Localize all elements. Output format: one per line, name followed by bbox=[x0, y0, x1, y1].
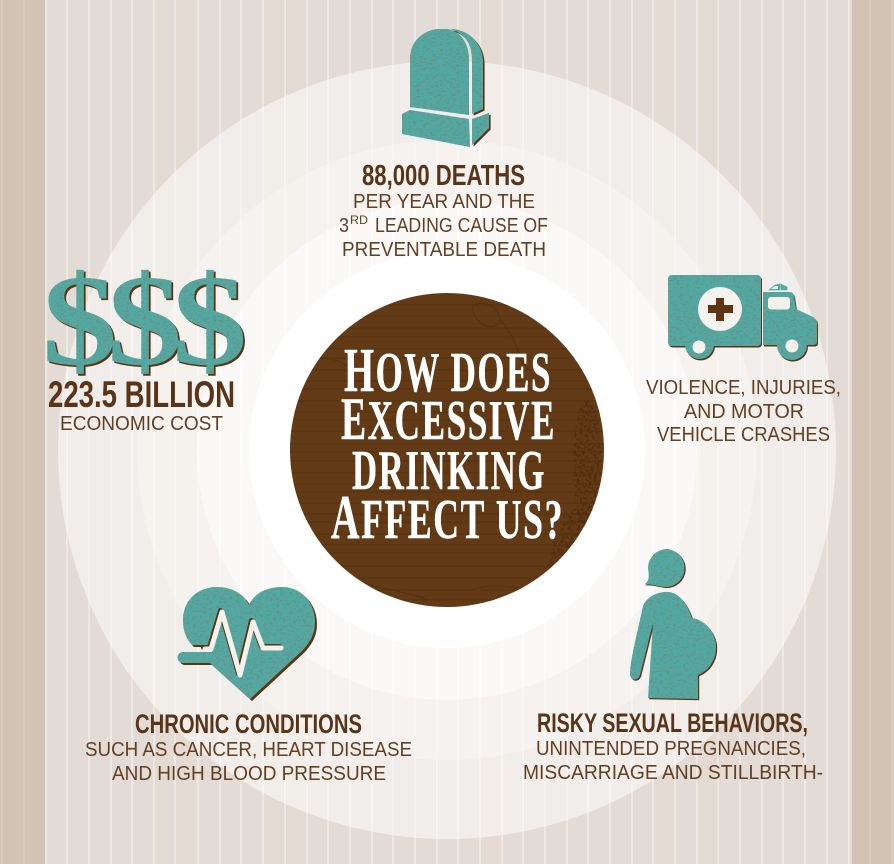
icon: ambulance bbox=[668, 275, 818, 362]
icon: dollar signs: $ bbox=[174, 251, 249, 394]
text: risky sexual behaviors: UNINTENDED PREGNANCIES, bbox=[536, 738, 806, 760]
title: HOW DOES bbox=[344, 337, 552, 405]
text: chronic conditions bbox=[85, 709, 412, 785]
title: DRINKING bbox=[352, 440, 546, 502]
icon: tombstone bbox=[402, 29, 491, 147]
icon: dollar signs: $ bbox=[44, 251, 119, 394]
text: chronic conditions: SUCH AS CANCER, HEART DISEASE bbox=[85, 739, 412, 761]
text: crashes: VIOLENCE, INJURIES, bbox=[646, 377, 841, 399]
text: crashes: AND MOTOR bbox=[684, 401, 804, 423]
title bbox=[331, 337, 564, 552]
icon: dollar signs bbox=[42, 249, 249, 394]
icon: pregnant woman bbox=[630, 549, 717, 700]
text: deaths: PER YEAR AND THE bbox=[353, 191, 535, 213]
center wood circle bbox=[290, 293, 610, 607]
concentric rings bbox=[58, 61, 836, 839]
icon: dollar signs: $ bbox=[109, 251, 184, 394]
text: economic cost: ECONOMIC COST bbox=[60, 413, 223, 435]
icon: heart with pulse bbox=[178, 587, 317, 701]
icon: dollar signs: $ bbox=[107, 249, 182, 393]
text: economic cost bbox=[48, 374, 235, 435]
title: EXCESSIVE bbox=[341, 386, 556, 452]
icon: dollar signs: $ bbox=[172, 249, 247, 393]
text: deaths: 3 bbox=[339, 215, 349, 237]
text: chronic conditions: CHRONIC CONDITIONS bbox=[135, 709, 362, 739]
text: chronic conditions: AND HIGH BLOOD PRESSURE bbox=[112, 763, 386, 785]
text: deaths: LEADING CAUSE OF bbox=[375, 215, 548, 237]
text: risky sexual behaviors: MISCARRIAGE AND STILLBIRTH- bbox=[523, 762, 823, 784]
text: economic cost: 223.5 BILLION bbox=[48, 374, 235, 415]
text: risky sexual behaviors bbox=[523, 708, 823, 784]
icon: dollar signs: $ bbox=[42, 249, 117, 393]
text: crashes bbox=[646, 377, 841, 446]
text: crashes: VEHICLE CRASHES bbox=[657, 424, 830, 446]
text: deaths: 88,000 DEATHS bbox=[362, 160, 525, 192]
title: AFFECT US? bbox=[331, 484, 564, 552]
text: deaths: RD bbox=[350, 213, 368, 227]
text: deaths bbox=[339, 160, 548, 261]
text: deaths: PREVENTABLE DEATH bbox=[342, 239, 546, 261]
